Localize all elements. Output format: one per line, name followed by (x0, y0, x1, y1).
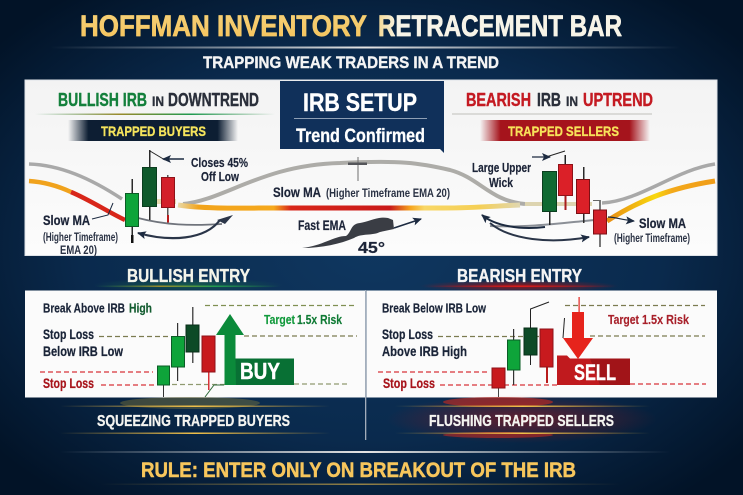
icon: 45 degree angle swoosh: 45° (358, 240, 385, 257)
text: middle slow MA label (273, 185, 450, 200)
panel: bearish entry (366, 290, 717, 398)
text: middle slow MA label: (Higher Timeframe EMA 20) (326, 186, 450, 200)
text: closes 45% off low: Off Low (201, 169, 240, 184)
text: left slow MA label: Slow MA (43, 212, 90, 228)
panel: IRB setup diagrams (25, 80, 717, 257)
text: large upper wick (472, 160, 531, 190)
text: large upper wick: Wick (489, 175, 514, 190)
text: right slow MA label: (Higher Timeframe) (614, 233, 690, 245)
icon: sell arrow (557, 297, 630, 385)
text: middle slow MA label: Slow MA (273, 185, 321, 200)
heading: bullish IRB in downtrend: DOWNTREND (168, 89, 259, 110)
banner: trapped sellers: TRAPPED SELLERS (508, 123, 619, 139)
heading: bullish entry (93, 266, 283, 292)
text: break above IRB high: Break Above IRB (43, 300, 125, 316)
text: stop loss above IRB high (382, 326, 467, 359)
arrow: right slow MA pointer (608, 217, 634, 221)
chart: slow moving average line (29, 162, 715, 226)
heading: bearish IRB in uptrend: IRB (537, 89, 561, 110)
heading: bearish entry: BEARISH ENTRY (457, 266, 582, 286)
callout: IRB setup (280, 81, 444, 153)
banner: trapped buyers (68, 120, 238, 141)
banner: flushing trapped sellers: FLUSHING TRAPPED SELLERS (429, 413, 614, 430)
icon: buy arrow: BUY (240, 358, 280, 384)
heading: bearish IRB in uptrend: BEARISH (466, 89, 531, 110)
text: target bearish: 1.5x Risk (642, 312, 690, 327)
text: stop loss above IRB high: Above IRB High (382, 343, 467, 359)
heading: bullish IRB in downtrend: IN (152, 94, 164, 109)
icon: sell arrow: SELL (574, 360, 616, 385)
text: stop loss red: Stop Loss (43, 375, 94, 391)
chart: left candlesticks (126, 150, 184, 243)
heading: bearish IRB in uptrend (466, 89, 653, 110)
heading: bearish IRB in uptrend: IN (566, 94, 578, 109)
text: stop loss below IRB low: Stop Loss (43, 326, 94, 342)
banner: flushing trapped sellers (387, 395, 657, 443)
title (80, 10, 622, 43)
icon: buy arrow (216, 314, 294, 385)
banner: trapped buyers: TRAPPED BUYERS (101, 123, 206, 139)
icon: 45 degree angle swoosh (302, 218, 421, 257)
text: stop loss below IRB low: Below IRB Low (43, 343, 123, 359)
text: break below IRB low: Break Below IRB Low (382, 300, 487, 316)
banner: squeezing trapped buyers (60, 397, 330, 434)
text: stop loss above IRB high: Stop Loss (382, 326, 433, 342)
banner: squeezing trapped buyers: SQUEEZING TRAPPED BUYERS (97, 413, 290, 430)
text: target bearish (608, 312, 690, 327)
text: closes 45% off low: Closes 45% (191, 155, 248, 170)
text: stop loss below IRB low (43, 326, 123, 359)
title: RETRACEMENT BAR (378, 10, 622, 43)
chart: fast EMA line (29, 181, 715, 221)
text: right slow MA label: Slow MA (639, 215, 686, 231)
heading: bearish entry (419, 266, 619, 292)
callout: IRB setup: Trend Confirmed (296, 125, 425, 147)
text: right slow MA label (614, 215, 690, 245)
chart: bearish entry candles (492, 302, 564, 397)
rule text: RULE: ENTER ONLY ON BREAKOUT OF THE IRB (141, 458, 576, 482)
heading: bullish IRB in downtrend: BULLISH IRB (58, 89, 147, 110)
text: target bearish: Target (608, 312, 640, 327)
text: target bullish (264, 312, 343, 327)
text: left slow MA label: EMA 20) (60, 245, 97, 257)
text: fast EMA label: Fast EMA (298, 217, 346, 233)
text: closes 45% off low (191, 155, 248, 184)
chart: bullish entry candles (158, 307, 224, 397)
arrow: right curved swoops (482, 215, 589, 240)
text: break above IRB high: High (129, 300, 152, 316)
heading: bullish entry: BULLISH ENTRY (127, 266, 250, 286)
arrow: left curved swoop (138, 215, 233, 238)
text: left slow MA label (43, 212, 118, 257)
subtitle: TRAPPING WEAK TRADERS IN A TREND (203, 53, 499, 72)
heading: bearish IRB in uptrend: UPTREND (583, 89, 653, 110)
arrow: left slow MA pointer (92, 203, 113, 219)
text: target bullish: Target (264, 312, 296, 327)
heading: bullish IRB in downtrend (58, 89, 259, 110)
icon: centre tick on slow MA (348, 157, 367, 181)
chart: right candlesticks (532, 151, 606, 247)
banner: trapped sellers (480, 120, 650, 141)
panel: bullish entry (25, 290, 365, 398)
text: stop loss red: Stop Loss (383, 375, 435, 391)
text: target bullish: 1.5x Risk (297, 312, 343, 327)
callout: IRB setup: IRB SETUP (303, 89, 417, 117)
text: large upper wick: Large Upper (472, 160, 531, 175)
title: HOFFMAN INVENTORY (80, 10, 367, 43)
text: left slow MA label: (Higher Timeframe) (43, 232, 118, 244)
